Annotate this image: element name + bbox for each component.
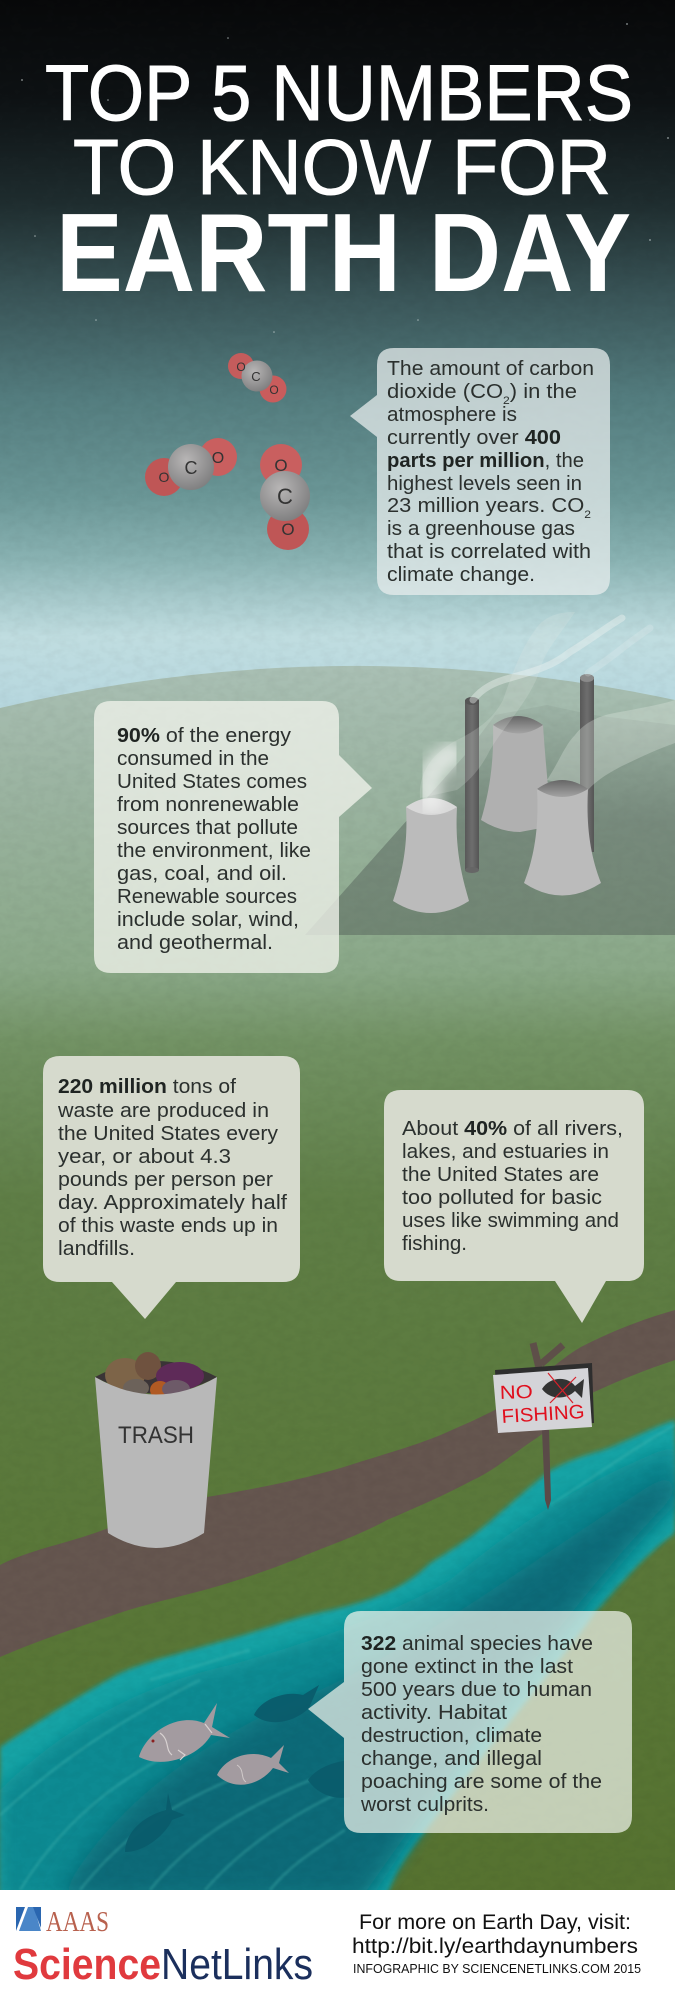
callout: species: change, and illegal	[361, 1748, 542, 1770]
callout: rivers: fishing.	[402, 1233, 467, 1255]
callout: energy: sources that pollute	[117, 817, 298, 839]
callout: energy	[94, 701, 372, 973]
logo: ScienceNetLinks: Science	[13, 1940, 161, 1989]
callout: CO2: parts per million, the	[387, 450, 584, 472]
callout: energy: United States comes	[117, 771, 307, 793]
callout: waste: waste are produced in	[57, 1100, 269, 1122]
fish with red cross	[542, 1373, 584, 1403]
icon: no fishing sign: NO	[499, 1382, 533, 1404]
footer text: INFOGRAPHIC BY SCIENCENETLINKS.COM 2015	[353, 1961, 641, 1976]
callout: waste: of this waste ends up in	[58, 1215, 278, 1237]
footer band	[0, 1890, 675, 2000]
callout: rivers: too polluted for basic	[402, 1187, 602, 1209]
callout: energy: 90% of the energy	[117, 725, 291, 747]
callout: rivers: About 40% of all rivers,	[402, 1118, 623, 1140]
molecule: right: O	[274, 456, 288, 475]
molecule: left: O	[212, 450, 224, 467]
smoke: plume behind right tower	[547, 700, 675, 790]
smokestack: left	[465, 697, 479, 873]
callout: energy: include solar, wind,	[117, 909, 299, 931]
logo: AAAS	[16, 1907, 109, 1938]
smokestack: right	[580, 674, 594, 852]
molecule: right	[260, 444, 310, 550]
icon: no fishing sign: FISHING	[501, 1401, 585, 1428]
cooling tower: middle	[481, 725, 552, 832]
callout: CO2: that is correlated with	[387, 541, 591, 563]
cooling tower: left	[393, 807, 469, 913]
molecule: small top: O	[236, 360, 246, 374]
callout: CO2: climate change.	[387, 564, 535, 586]
callout: species	[308, 1611, 632, 1833]
callout: CO2: currently over 400	[387, 427, 561, 449]
logo: ScienceNetLinks	[13, 1940, 313, 1989]
title	[45, 48, 633, 315]
callout: energy: consumed in the	[117, 748, 269, 770]
callout: waste: the United States every	[58, 1123, 278, 1145]
title: EARTH DAY	[56, 191, 631, 315]
logo: AAAS: AAAS	[46, 1907, 109, 1938]
callout: rivers: uses like swimming and	[402, 1210, 619, 1232]
icon: trash can	[95, 1352, 217, 1548]
icon: CO2 molecules	[145, 353, 310, 550]
icon: no fishing sign	[493, 1343, 594, 1510]
river	[0, 1420, 675, 1900]
callout: waste: pounds per person per	[58, 1169, 273, 1191]
callout: CO2: dioxide (CO	[387, 381, 493, 403]
callout: species: worst culprits.	[360, 1794, 489, 1816]
callout: waste: 220 million tons of	[58, 1076, 236, 1098]
icon: power plant	[393, 612, 675, 913]
callout: CO2: atmosphere is	[387, 404, 517, 426]
callout: CO2: The amount of carbon	[387, 358, 594, 380]
callout: waste: landfills.	[58, 1238, 135, 1260]
callout: energy: from nonrenewable	[117, 794, 299, 816]
logo: ScienceNetLinks: NetLinks	[161, 1940, 313, 1989]
dirt path	[0, 1310, 675, 1657]
icon: AAAS triangle mark	[16, 1907, 41, 1931]
fish: dark shadows	[125, 1685, 350, 1852]
callout: waste: year, or about 4.3	[58, 1146, 231, 1168]
callout: energy: gas, coal, and oil.	[117, 863, 287, 885]
callout: CO2: highest levels seen in	[387, 473, 582, 495]
molecule: right: O	[281, 520, 295, 539]
callout: waste	[43, 1056, 300, 1319]
icon: trash can: TRASH	[118, 1422, 194, 1449]
callout: species: 322 animal species have	[361, 1633, 593, 1655]
footer text: For more on Earth Day, visit:	[359, 1911, 631, 1934]
molecule: left	[145, 438, 237, 496]
fish: grey large	[139, 1703, 230, 1762]
icon: fish group	[125, 1685, 350, 1852]
molecule: small top	[228, 353, 286, 402]
callout: species: activity. Habitat	[361, 1702, 507, 1724]
callout: energy: Renewable sources	[117, 886, 297, 908]
molecule: small top: O	[269, 383, 279, 397]
callout: waste: day. Approximately half	[58, 1192, 287, 1214]
callout: rivers: the United States are	[402, 1164, 599, 1186]
callout: species: destruction, climate	[361, 1725, 542, 1747]
smoke: plumes	[420, 612, 650, 800]
callout: CO2: 23 million years. CO	[387, 495, 567, 517]
callout: CO2	[350, 348, 610, 595]
stars	[21, 23, 669, 333]
title: TO KNOW FOR	[73, 123, 611, 211]
trash pile	[95, 1352, 217, 1399]
callout: energy: and geothermal.	[117, 932, 273, 954]
callout: rivers: lakes, and estuaries in	[402, 1141, 609, 1163]
footer text	[352, 1911, 641, 1976]
callout: rivers	[384, 1090, 644, 1323]
callout: CO2: is a greenhouse gas	[387, 518, 575, 540]
callout: CO2: ) in the	[510, 381, 577, 403]
molecule: right: C	[277, 484, 293, 509]
callout: CO2: 2	[584, 509, 591, 521]
title: TOP 5 NUMBERS	[45, 48, 633, 137]
callout: CO2: 2	[503, 395, 510, 407]
cooling tower: right	[524, 789, 601, 896]
callout: species: poaching are some of the	[361, 1771, 602, 1793]
molecule: small top: C	[251, 369, 261, 384]
callout: species: gone extinct in the last	[361, 1656, 573, 1678]
fish: grey small	[217, 1745, 289, 1785]
molecule: left: C	[184, 458, 198, 478]
callout: energy: the environment, like	[117, 840, 311, 862]
shadow: factory ground	[305, 705, 675, 935]
molecule: left: O	[159, 469, 170, 485]
footer text: http://bit.ly/earthdaynumbers	[352, 1935, 638, 1958]
callout: species: 500 years due to human	[361, 1679, 592, 1701]
